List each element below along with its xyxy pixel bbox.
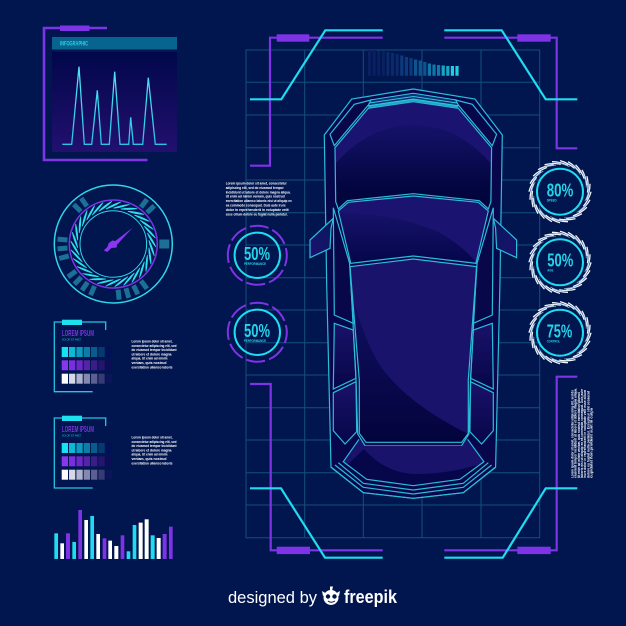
swatch panel frame bbox=[54, 322, 106, 392]
panel: infographic line chart bbox=[44, 26, 177, 160]
swatch description bbox=[132, 338, 177, 369]
swatch description: exercitation ullamco laboris bbox=[132, 364, 172, 369]
bracket tab bbox=[60, 26, 90, 31]
swatch grid bbox=[62, 443, 112, 480]
text block: left of car: exercitation ullamco laboris nisi ut aliquip ex bbox=[226, 198, 292, 203]
swatch description: veniam, quis nostrud bbox=[132, 360, 167, 365]
gauge inner ring bbox=[80, 211, 147, 277]
swatch description: Lorem ipsum dolor sit amet, bbox=[132, 434, 172, 440]
gauge ticks bbox=[57, 197, 169, 300]
HUD bracket: top left bbox=[250, 30, 383, 166]
top gradient level bars bbox=[368, 50, 459, 76]
swatch panel frame bbox=[54, 418, 106, 488]
vertical text block bbox=[569, 388, 594, 478]
text block: left of car: ea commodo consequat. Duis aute irure bbox=[226, 202, 286, 208]
vertical text block: cupidatat non proident sunt in culpa bbox=[589, 407, 594, 478]
stat circle: performance 50% lower: PERFORMANCE bbox=[244, 339, 266, 343]
car top view bbox=[310, 89, 517, 498]
stat circle: control 75% bbox=[529, 302, 591, 364]
roof bbox=[338, 196, 488, 263]
footer credit bbox=[228, 586, 398, 607]
stat circle: speed 80% bbox=[529, 161, 591, 223]
swatch description: veniam, quis nostrud bbox=[132, 456, 167, 461]
stat circle: performance 50% lower: 50% bbox=[244, 320, 270, 341]
panel bracket bbox=[44, 28, 148, 160]
designed by: designed by bbox=[228, 588, 317, 607]
rear window bbox=[350, 259, 477, 446]
swatch description: consectetur adipiscing elit, sed bbox=[132, 343, 177, 348]
stat circle: performance 50% upper: PERFORMANCE bbox=[244, 262, 266, 266]
text block: left of car: Ut enim ad minim veniam, quis nostrud bbox=[226, 194, 285, 199]
stat circle: control 75%: 75% bbox=[547, 320, 572, 341]
swatch description: aliqua. Ut enim ad minim bbox=[132, 452, 168, 457]
stat circle: performance 50% upper bbox=[228, 226, 287, 285]
vertical text block: Lorem ipsum dolor sit amet, consectetur adipiscing elit, sed do bbox=[569, 390, 574, 478]
HUD bracket: bottom left bbox=[250, 384, 383, 558]
right side panels and mirror bbox=[413, 100, 517, 498]
swatch description: Lorem ipsum dolor sit amet, bbox=[132, 338, 172, 344]
windshield bbox=[335, 102, 492, 209]
stat circle: speed 80%: 80% bbox=[547, 180, 573, 201]
stat circle: age 50%: AGE bbox=[547, 269, 554, 273]
text block: left of car: adipiscing elit, sed do eiusmod tempor bbox=[226, 185, 284, 190]
swatch description: ut labore et dolore magna bbox=[132, 351, 172, 356]
panel: colour swatches one bbox=[54, 320, 177, 392]
swatch description: do eiusmod tempor incididunt bbox=[132, 347, 177, 352]
swatch subheading: DOLOR SIT AMET bbox=[62, 338, 81, 342]
icon: freepik mascot bbox=[322, 586, 340, 605]
front lip band bbox=[368, 93, 458, 108]
vertical text block: dolore eu fugiat nulla pariatur. Excepteur sint occaecat bbox=[585, 390, 590, 478]
HUD bracket: bottom right bbox=[444, 377, 577, 558]
swatch grid bbox=[62, 347, 112, 384]
left side panels and mirror bbox=[310, 100, 413, 498]
stat circle: age 50%: 50% bbox=[547, 250, 573, 271]
gauge braided ring bbox=[71, 201, 156, 287]
swatch description: ut labore et dolore magna bbox=[132, 447, 172, 452]
swatch description bbox=[132, 434, 177, 465]
gauge bbox=[54, 185, 172, 303]
stat circle: performance 50% lower bbox=[228, 303, 287, 362]
text block: left of car: incididunt ut labore et dolore magna aliqua. bbox=[226, 189, 291, 194]
text block: left of car: dolor in reprehenderit in voluptate velit bbox=[226, 207, 289, 212]
chart header bbox=[52, 37, 177, 50]
vertical text block: irure dolor in reprehenderit in voluptate velit esse cillum bbox=[582, 390, 587, 478]
swatch subheading: DOLOR SIT AMET bbox=[62, 434, 81, 438]
header label: INFOGRAPHIC bbox=[60, 40, 88, 48]
vertical text block: Ut enim ad minim veniam, quis nostrud exercitation ullamco bbox=[576, 392, 581, 478]
gauge needle bbox=[104, 228, 133, 252]
car body bbox=[324, 89, 502, 498]
swatch description: exercitation ullamco laboris bbox=[132, 460, 172, 465]
text block: left of car bbox=[226, 180, 292, 216]
vertical text block: laboris nisi ut aliquip ex ea commodo consequat. Duis aute bbox=[579, 388, 584, 478]
swatch panel tab bbox=[62, 320, 82, 325]
bar chart bbox=[54, 510, 173, 559]
stat circle: performance 50% upper: 50% bbox=[244, 243, 270, 264]
panel: colour swatches two bbox=[54, 416, 177, 488]
gauge purple ring bbox=[69, 200, 157, 288]
freepik wordmark: freepik bbox=[344, 587, 398, 607]
swatch description: do eiusmod tempor incididunt bbox=[132, 443, 177, 448]
swatch description: consectetur adipiscing elit, sed bbox=[132, 439, 177, 444]
rear deck bbox=[343, 439, 484, 486]
swatch description: aliqua. Ut enim ad minim bbox=[132, 356, 168, 361]
chart line bbox=[62, 67, 167, 144]
gauge outer ring bbox=[54, 185, 172, 303]
text block: left of car: esse cillum dolore eu fugiat nulla pariatur. bbox=[226, 211, 288, 216]
vertical text block: eiusmod tempor incididunt ut labore et dolore magna aliqua. bbox=[573, 388, 578, 478]
swatch heading: LOREM IPSUM bbox=[62, 424, 94, 434]
swatch panel tab bbox=[62, 416, 82, 421]
HUD bracket: top right bbox=[444, 30, 577, 148]
stat circle: age 50% bbox=[529, 231, 591, 293]
text block: left of car: Lorem ipsum dolor sit amet, consectetur bbox=[226, 180, 287, 186]
chart background bbox=[52, 52, 177, 152]
blueprint grid bbox=[246, 50, 540, 538]
stat circle: control 75%: CONTROL bbox=[547, 339, 561, 343]
swatch heading: LOREM IPSUM bbox=[62, 328, 94, 338]
stat circle: speed 80%: SPEED bbox=[547, 199, 557, 203]
